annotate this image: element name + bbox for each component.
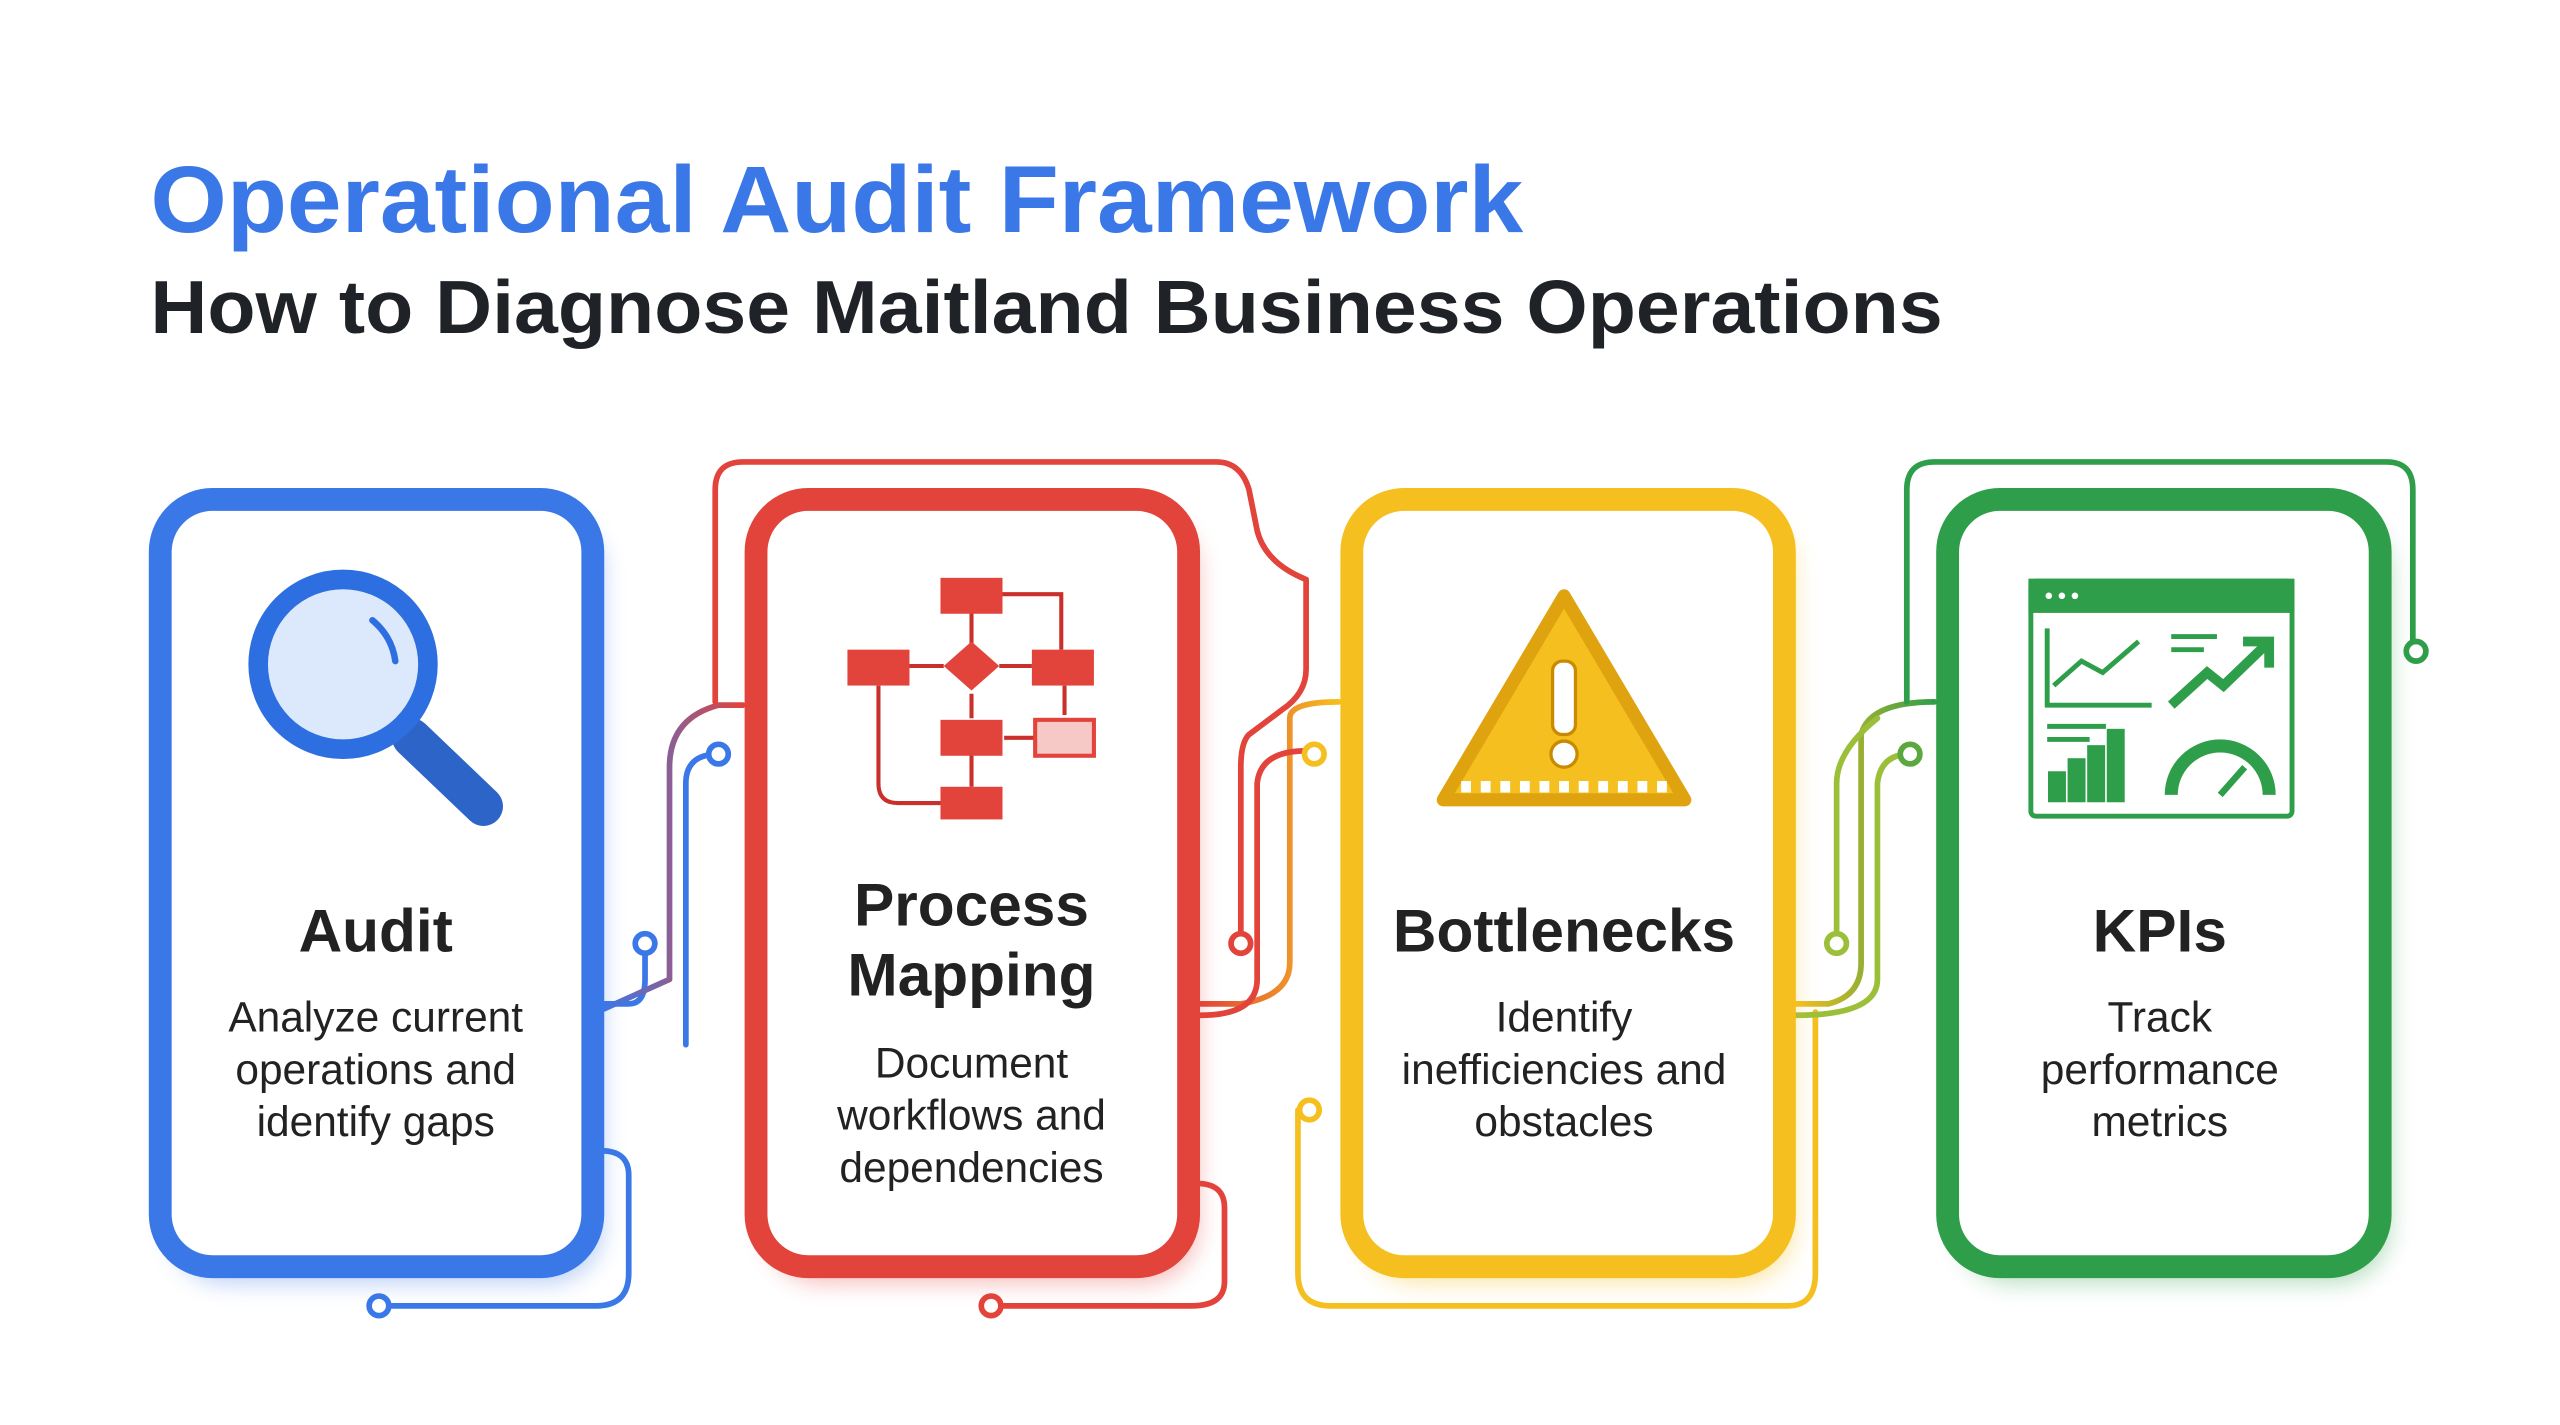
- description: identify gaps: [257, 1098, 495, 1145]
- panel: bottlenecks: [1352, 499, 1794, 1283]
- subtitle: How to Diagnose Maitland Business Operations: [150, 265, 1943, 349]
- icon: magnifier: [258, 579, 483, 806]
- description: Identify: [1496, 994, 1633, 1041]
- icon: flowchart: [847, 578, 1094, 819]
- circuit lines: [392, 462, 2413, 1306]
- description: Track: [2108, 994, 2213, 1041]
- description: Document: [875, 1039, 1068, 1086]
- description: operations and: [235, 1046, 516, 1093]
- description: obstacles: [1474, 1098, 1654, 1145]
- description: metrics: [2091, 1098, 2228, 1145]
- heading: Bottlenecks: [1393, 897, 1735, 965]
- description: workflows and: [836, 1092, 1106, 1139]
- heading: Audit: [299, 897, 453, 965]
- heading: Mapping: [847, 941, 1096, 1009]
- panel: kpis: [1948, 499, 2390, 1283]
- icon: dashboard: [2031, 581, 2292, 816]
- heading: KPIs: [2093, 897, 2227, 965]
- description: Analyze current: [228, 994, 523, 1041]
- panel: audit: [160, 499, 603, 1283]
- description: performance: [2041, 1046, 2279, 1093]
- heading: Process: [854, 871, 1089, 939]
- description: dependencies: [839, 1144, 1104, 1191]
- panel: process mapping: [756, 499, 1198, 1283]
- icon: warning: [1443, 596, 1685, 800]
- title: Operational Audit Framework: [150, 147, 1524, 253]
- description: inefficiencies and: [1402, 1046, 1726, 1093]
- connector dots: [369, 641, 2426, 1316]
